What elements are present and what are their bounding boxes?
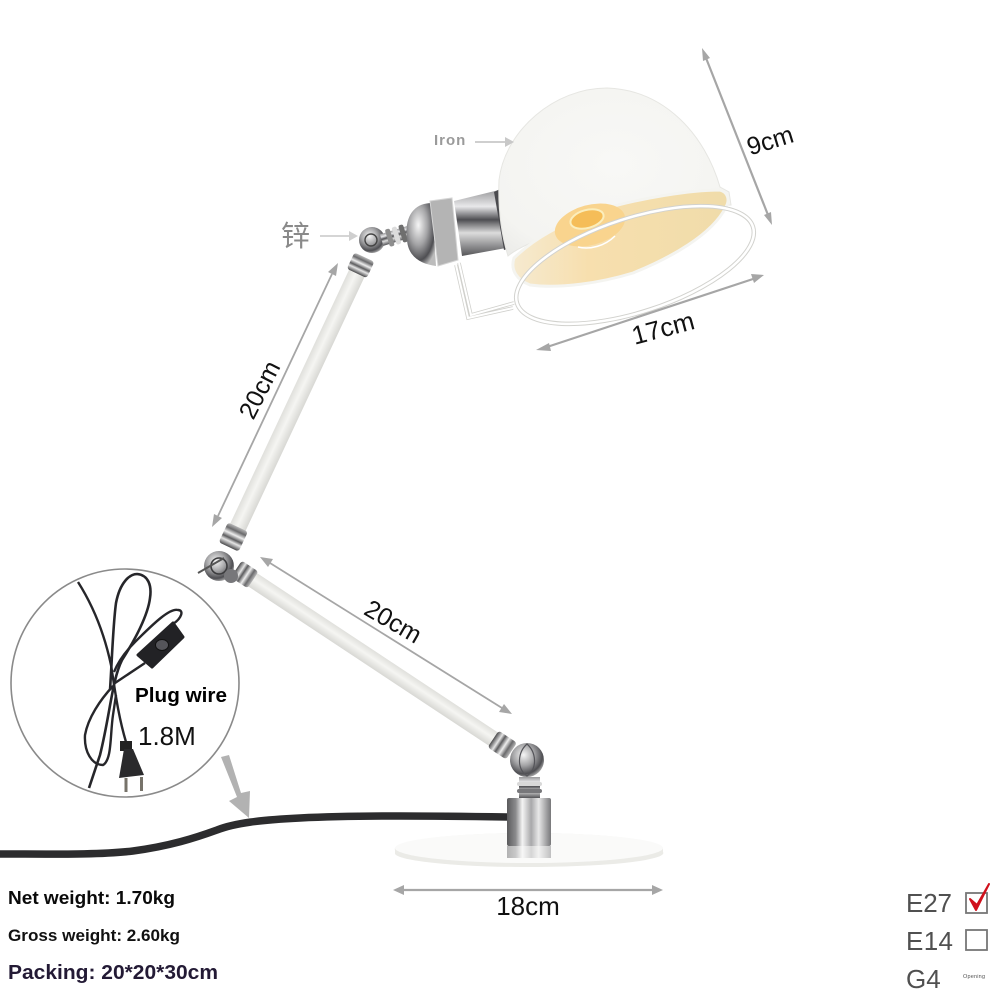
label: Iron: Iron — [434, 132, 466, 149]
red check mark — [970, 884, 989, 910]
coiled cord — [78, 574, 181, 788]
option: E27 checked: E27 — [906, 888, 952, 918]
upper arm — [219, 252, 374, 552]
option: E14 unchecked: E14 — [906, 926, 953, 956]
lamp base plate — [395, 833, 663, 867]
upper arm lower collar — [219, 522, 248, 552]
option: E14 unchecked — [906, 926, 987, 956]
label: lower arm 20cm: 20cm — [360, 595, 426, 649]
wire guard ring and bracket — [456, 182, 767, 348]
label: 1.8M: 1.8M — [138, 721, 196, 751]
dimension arrow: shade width 17cm — [536, 274, 764, 351]
label: upper arm 20cm: 20cm — [234, 356, 286, 424]
label: zinc: 锌 — [281, 220, 310, 253]
spec: packing: Packing: 20*20*30cm — [8, 962, 218, 984]
inline switch — [138, 623, 183, 667]
plug wire callout circle — [11, 569, 239, 797]
shade inner surface — [513, 190, 728, 286]
shoulder joint and neck — [359, 222, 415, 253]
lamp head socket — [407, 189, 510, 266]
option: G4: G4 — [906, 964, 941, 994]
euro plug — [119, 741, 144, 792]
dimension arrow: shade height 9cm — [702, 48, 772, 225]
arrow: Iron pointer — [475, 137, 514, 147]
dimension arrow: base 18cm — [393, 885, 663, 895]
label: Plug wire: Plug wire — [135, 685, 227, 707]
glowing bulb — [550, 196, 630, 254]
label: Opening: Opening — [963, 974, 985, 980]
lamp shade dome — [499, 88, 731, 286]
lower arm elbow collar — [231, 561, 259, 588]
label: 17cm: 17cm — [628, 305, 698, 351]
base chrome post — [507, 743, 551, 858]
arrow: from callout to cable — [221, 755, 250, 818]
spec: net weight: Net weight: 1.70kg — [8, 888, 175, 908]
lower arm — [231, 561, 517, 759]
label: 18cm: 18cm — [496, 891, 560, 921]
spec: gross weight: Gross weight: 2.60kg — [8, 927, 180, 945]
label: 9cm: 9cm — [744, 121, 797, 161]
upper arm top collar — [347, 252, 374, 278]
option: E27 checked — [906, 884, 989, 918]
lower arm foot collar — [488, 731, 517, 759]
arrow: zinc pointer — [320, 231, 358, 241]
power cable on table — [0, 816, 508, 854]
elbow joint — [198, 551, 238, 583]
dimension arrow: lower arm 20cm — [260, 557, 512, 714]
dimension arrow: upper arm 20cm — [212, 263, 338, 527]
